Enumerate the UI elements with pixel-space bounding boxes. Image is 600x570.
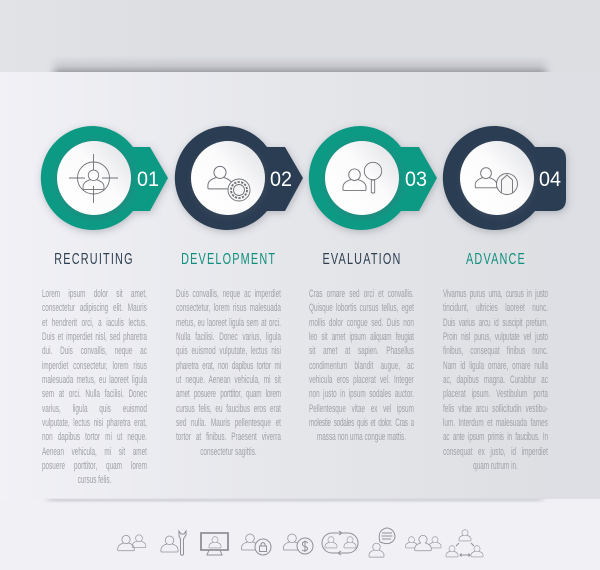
icon: person with lock xyxy=(241,534,271,555)
text block: advance: Nam id ligula ornare, ornare nulla xyxy=(443,360,548,372)
text block: evaluation: sit amet at sapien. Phasellus xyxy=(309,345,414,357)
text block: development: tortor at finibus. Praesent viverra xyxy=(176,431,281,443)
icon: people exchange xyxy=(322,531,358,555)
text block: recruiting: Lorem ipsum dolor sit amet, xyxy=(42,288,147,300)
text block: advance: finibus, consequat finibus nunc. xyxy=(443,345,548,357)
right background strip xyxy=(545,72,600,499)
step 2 badge xyxy=(175,126,303,230)
step numbers xyxy=(137,168,561,191)
text block: development xyxy=(176,288,281,458)
text block: evaluation: condimentum blandit augue, ac xyxy=(309,360,414,372)
text block: advance: placerat ipsum. Vestibulum porta xyxy=(443,388,548,400)
text block: evaluation: non justo in ipsum sodales auctor. xyxy=(309,388,414,400)
heading: recruiting: RECRUITING xyxy=(54,251,134,268)
text block: recruiting: sem at orci. Nulla facilisi. Donec xyxy=(42,388,147,400)
text block: advance: lum. Interdum et malesuada fames xyxy=(443,417,548,429)
text block: evaluation: molestie sodales quis et dolor. Cras a xyxy=(309,417,414,429)
text block: evaluation xyxy=(309,288,414,443)
text block: advance xyxy=(443,288,548,472)
icon: team network xyxy=(446,530,483,557)
heading: advance: ADVANCE xyxy=(466,251,526,268)
text block: evaluation: massa non urna congue mattis. xyxy=(317,431,406,443)
text block: recruiting: varius, ligula quis euismod xyxy=(42,403,147,415)
heading: evaluation: EVALUATION xyxy=(322,251,402,268)
step numbers: 01 xyxy=(137,168,159,191)
text block: evaluation: leo sit amet ipsum aliquam feugiat xyxy=(309,331,414,343)
text block: recruiting: malesuada metus, eu laoreet ligula xyxy=(42,374,147,386)
text block: development: Nulla facilisi. Donec varius, ligula xyxy=(176,331,281,343)
text block: development: metus, eu laoreet ligula sem at orci. xyxy=(176,317,281,329)
step numbers: 02 xyxy=(270,168,292,191)
text block: recruiting xyxy=(42,288,147,486)
icon: person with wrench xyxy=(161,531,186,556)
icon: monitor person xyxy=(201,533,228,555)
text block: development: amet posuere porttitor, quam lorem xyxy=(176,388,281,400)
text block: development: sed nulla. Mauris pellentesque et xyxy=(176,417,281,429)
text block: recruiting: Duis et imperdiet nisl, sed pharetra xyxy=(42,331,147,343)
text block: advance: tincidunt, ultricies laoreet nunc. xyxy=(443,302,548,314)
text block: development: consectetur, lorem risus malesuada xyxy=(176,302,281,314)
text block: development: Duis convallis, neque ac imperdiet xyxy=(176,288,281,300)
text block: development: quis euismod vulputate, lectus nisi xyxy=(176,345,281,357)
text block: development: consectetur sagittis. xyxy=(200,446,257,458)
text block: recruiting: Aenean vehicula, mi sit amet xyxy=(42,446,147,458)
icon: person with arrow badge xyxy=(475,168,518,194)
text block: evaluation: vehicula eros placerat vel. Integer xyxy=(309,374,414,386)
icon: two people xyxy=(118,535,146,551)
step 1 badge xyxy=(41,126,168,230)
text block: recruiting: consectetur adipiscing elit. Mauris xyxy=(42,302,147,314)
bottom icon row xyxy=(118,528,483,557)
lower background xyxy=(0,499,600,570)
text block: development: ut neque. Aenean vehicula, mi sit xyxy=(176,374,281,386)
text block: development: cursus felis, eu faucibus eros erat xyxy=(176,403,281,415)
icon: person with magnifier xyxy=(343,162,382,193)
text block: advance: Proin nisl purus, vulputate vel justo xyxy=(443,331,548,343)
text block: recruiting: cursus felis. xyxy=(78,474,111,486)
text block: recruiting: non dapibus tortor mi ut neque. xyxy=(42,431,147,443)
text block: evaluation: Cras ornare sed orci et convallis. xyxy=(309,288,414,300)
text block: evaluation: Quisque lobortis cursus tellus, eget xyxy=(309,302,414,314)
text block: evaluation: mollis dolor congue sed. Duis non xyxy=(309,317,414,329)
icon: target person xyxy=(69,154,118,203)
text block: development: pharetra erat, non dapibus tortor mi xyxy=(176,360,281,372)
text block: recruiting: et hendrerit orci, a iaculis lectus. xyxy=(42,317,147,329)
top panel shadow xyxy=(54,56,546,73)
text block: advance: ac, dapibus magna. Curabitur ac xyxy=(443,374,548,386)
text block: evaluation: Pellentesque vitae ex vel ipsum xyxy=(309,403,414,415)
step 4 badge xyxy=(443,126,566,230)
text block: recruiting: dui. Duis convallis, neque ac xyxy=(42,345,147,357)
icon: group of three xyxy=(405,535,441,551)
text block: recruiting: imperdiet consectetur, lorem risus xyxy=(42,360,147,372)
heading: development: DEVELOPMENT xyxy=(181,251,276,268)
icon: person with gear xyxy=(208,166,250,201)
icon: person with speech bubble xyxy=(369,528,395,557)
step numbers: 03 xyxy=(405,168,427,191)
step numbers: 04 xyxy=(539,168,561,191)
text block: advance: consequat ex justo, id imperdiet xyxy=(443,446,548,458)
text block: advance: Duis varius arcu id suscipit pretium. xyxy=(443,317,548,329)
step 3 badge xyxy=(309,126,437,230)
text block: advance: Vivamus purus urna, cursus in justo xyxy=(443,288,548,300)
text block: recruiting: vulputate, lectus nisi pharetra erat, xyxy=(42,417,147,429)
icon: person with dollar xyxy=(283,534,313,554)
top background band xyxy=(0,0,600,72)
main panel xyxy=(0,72,545,499)
text block: advance: quam rutrum in. xyxy=(473,460,518,472)
bottom panel shadow xyxy=(48,499,542,503)
text block: advance: ac ante ipsum primis in faucibus. In xyxy=(443,431,548,443)
text block: recruiting: posuere porttitor, quam lorem xyxy=(42,460,147,472)
text block: advance: felis vitae arcu sollicitudin vestibu- xyxy=(443,403,548,415)
